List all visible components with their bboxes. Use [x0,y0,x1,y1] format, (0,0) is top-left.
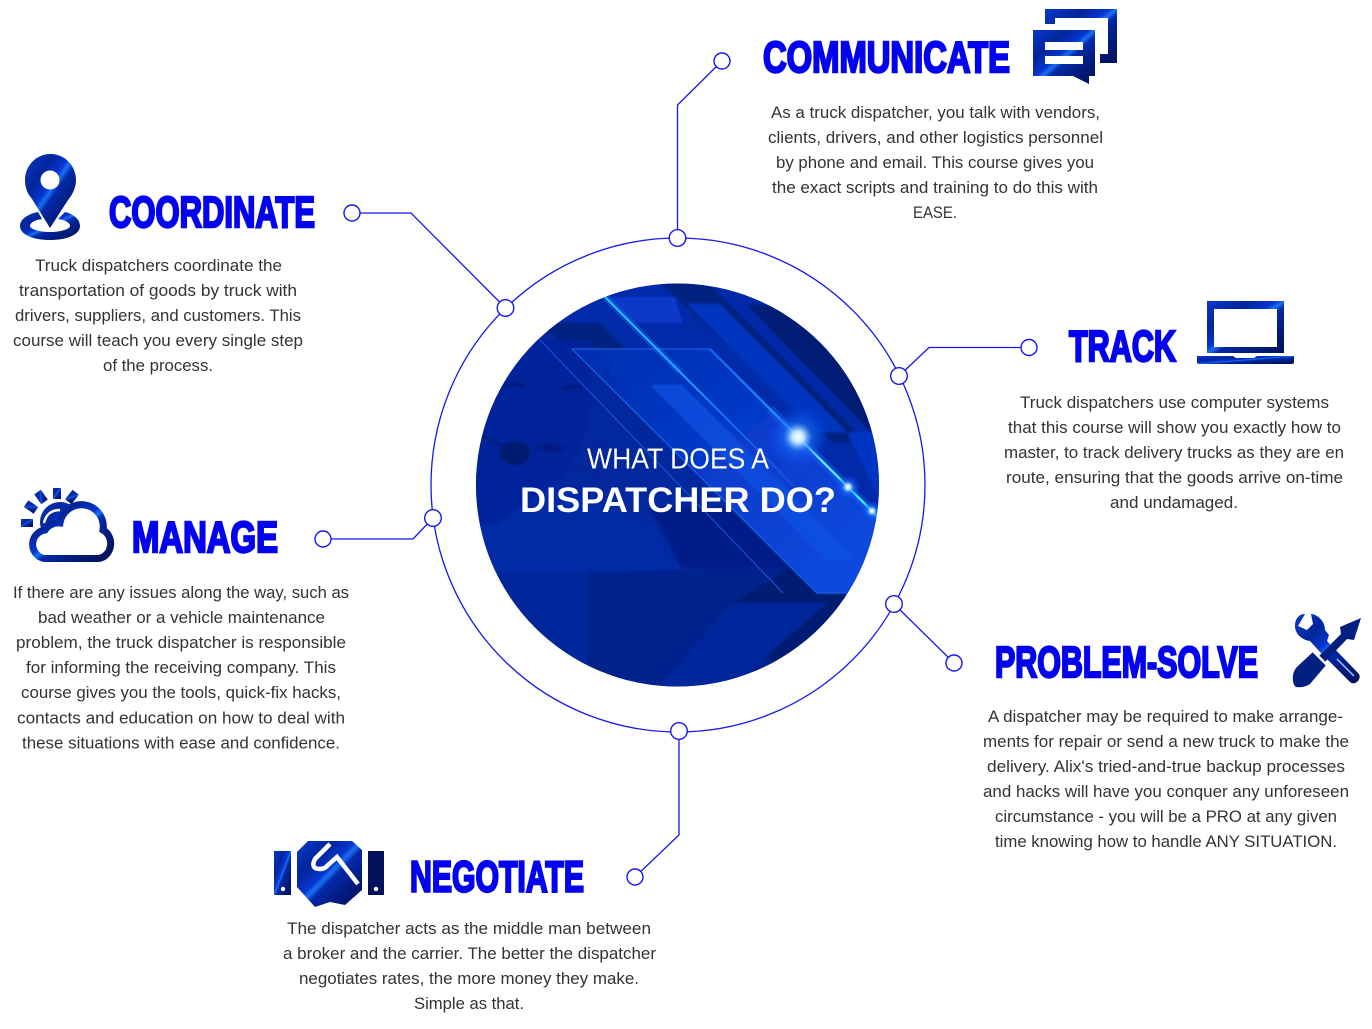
text block: the exact scripts and training to do this with [772,178,1098,197]
panel: problem-solve [983,614,1361,851]
connector: coordinate [344,205,514,316]
text block: Truck dispatchers coordinate the [35,256,282,275]
heading: TRACK [1069,323,1176,371]
icon: chat bubbles [1033,9,1117,84]
connector: track [891,340,1037,384]
heading: NEGOTIATE [410,854,584,902]
text block: bad weather or a vehicle maintenance [38,608,325,627]
text block [1004,393,1344,512]
text block [13,256,303,375]
text block: time knowing how to handle ANY SITUATION. [995,832,1337,851]
text block: and undamaged. [1110,493,1238,512]
text block: and hacks will have you conquer any unforeseen [983,782,1349,801]
text block: problem, the truck dispatcher is responsible [16,633,346,652]
icon: sun and cloud [21,488,111,558]
text block: by phone and email. This course gives you [776,153,1094,172]
text block: route, ensuring that the goods arrive on-time [1006,468,1343,487]
text block: these situations with ease and confidence. [22,734,340,752]
panel: coordinate [13,154,315,375]
panel: negotiate [274,841,656,1013]
icon: wrench and screwdriver [1293,614,1361,687]
icon: handshake [274,841,384,907]
text block [13,583,349,752]
text block: Truck dispatchers use computer systems [1020,393,1329,412]
text block: negotiates rates, the more money they make. [299,969,639,988]
text block: that this course will show you exactly how to [1008,418,1341,437]
text block: drivers, suppliers, and customers. This [15,306,301,325]
text block: of the process. [103,356,213,375]
text block: circumstance - you will be a PRO at any given [995,807,1337,826]
heading: MANAGE [132,514,278,562]
connector: manage [315,510,441,547]
text block: clients, drivers, and other logistics personnel [768,128,1103,147]
text block: The dispatcher acts as the middle man between [287,919,651,938]
connector: communicate [669,53,730,246]
text block: Simple as that. [414,994,524,1013]
icon: laptop [1197,301,1294,364]
central disc with title [470,275,890,695]
panel: communicate [763,9,1117,222]
text block: contacts and education on how to deal with [17,708,345,728]
panel: manage [13,488,349,752]
heading: COORDINATE [109,189,315,237]
heading: COMMUNICATE [763,34,1010,82]
text block: master, to track delivery trucks as they are en [1004,443,1344,462]
text block: transportation of goods by truck with [19,281,297,300]
text block [768,103,1103,222]
text block [283,919,656,1013]
title [520,444,836,520]
text block: a broker and the carrier. The better the dispatcher [283,944,656,963]
text block: delivery. Alix's tried-and-true backup processes [987,757,1345,776]
icon: map pin [20,154,80,240]
text block [983,707,1349,851]
text block: If there are any issues along the way, such as [13,583,349,602]
panel: track [1004,301,1344,512]
text block: A dispatcher may be required to make arrange- [988,707,1343,726]
text block: course gives you the tools, quick-fix hacks, [21,683,341,702]
title: DISPATCHER DO? [520,481,836,520]
text block: course will teach you every single step [13,331,303,350]
connector: negotiate [627,723,687,885]
outer ring [431,238,925,732]
text block: ments for repair or send a new truck to make the [983,732,1349,751]
text block: EASE. [913,203,957,222]
connector: problem-solve [886,596,962,671]
text block: for informing the receiving company. This [26,658,336,677]
heading: PROBLEM-SOLVE [995,639,1258,687]
text block: As a truck dispatcher, you talk with vendors, [771,103,1100,122]
title: WHAT DOES A [587,444,770,476]
